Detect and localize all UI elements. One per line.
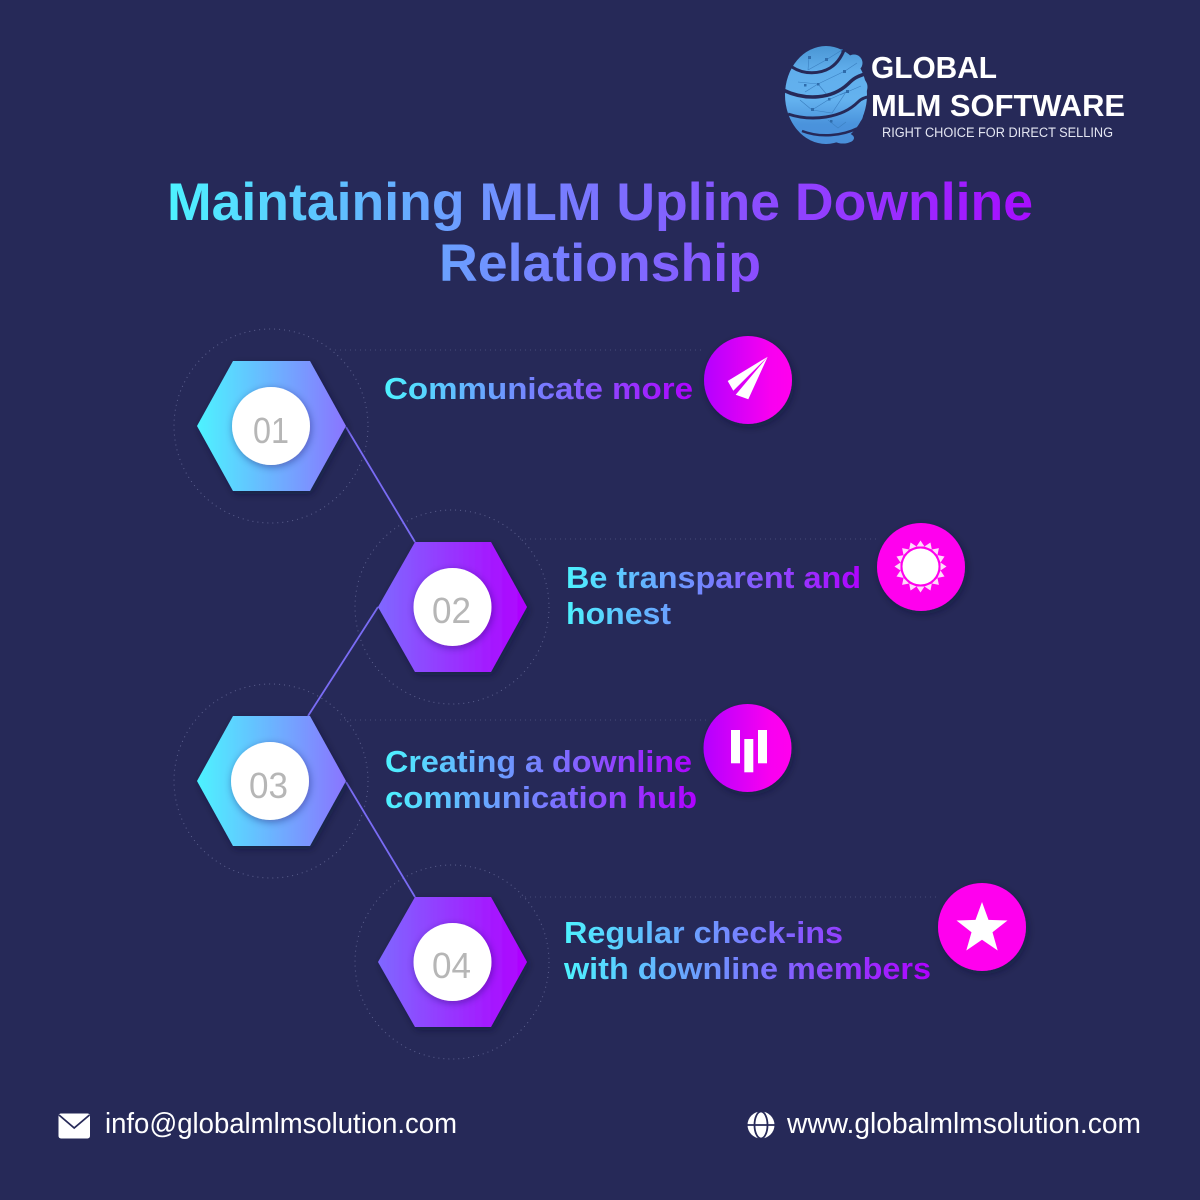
connector lines (308, 427, 415, 897)
dotted rings and guide lines (174, 329, 940, 1059)
text: be transparent and honest: Be transparent and (566, 560, 861, 595)
text: regular check-ins with downline members: with downline members (563, 951, 931, 986)
step 04 hexagon: 04 (432, 945, 471, 986)
icon: paper plane (704, 336, 792, 424)
step 01 hexagon (197, 361, 346, 491)
logo (783, 42, 1125, 144)
logo globe (783, 42, 874, 144)
step 04 hexagon (378, 897, 527, 1027)
title: Relationship (439, 234, 761, 293)
text: be transparent and honest (566, 560, 861, 631)
text: regular check-ins with downline members (563, 915, 931, 986)
step 01 hexagon: 01 (253, 410, 289, 451)
logo name line 1: GLOBAL (871, 50, 997, 85)
website address: www.globalmlmsolution.com (786, 1108, 1141, 1140)
icon: star (938, 883, 1026, 971)
email address: info@globalmlmsolution.com (105, 1108, 457, 1140)
text: be transparent and honest: honest (566, 596, 671, 631)
text: creating a downline communication hub: communication hub (385, 780, 697, 815)
step 02 hexagon: 02 (432, 590, 471, 631)
icon: bars (704, 704, 792, 792)
text: regular check-ins with downline members: Regular check-ins (564, 915, 843, 950)
title: Maintaining MLM Upline Downline (167, 173, 1033, 232)
logo tagline: RIGHT CHOICE FOR DIRECT SELLING (882, 125, 1113, 140)
step 02 hexagon (378, 542, 527, 672)
text: creating a downline communication hub: Creating a downline (385, 744, 692, 779)
title (167, 173, 1033, 293)
footer email (58, 1108, 457, 1140)
step 03 hexagon (197, 716, 346, 846)
text: communicate more: Communicate more (384, 371, 693, 406)
step 03 hexagon: 03 (249, 765, 288, 806)
logo name line 2: MLM SOFTWARE (871, 88, 1125, 123)
footer website (748, 1108, 1141, 1140)
text: creating a downline communication hub (385, 744, 697, 815)
icon: envelope (58, 1114, 90, 1138)
icon: globe (748, 1112, 774, 1138)
icon: sun (877, 523, 965, 611)
